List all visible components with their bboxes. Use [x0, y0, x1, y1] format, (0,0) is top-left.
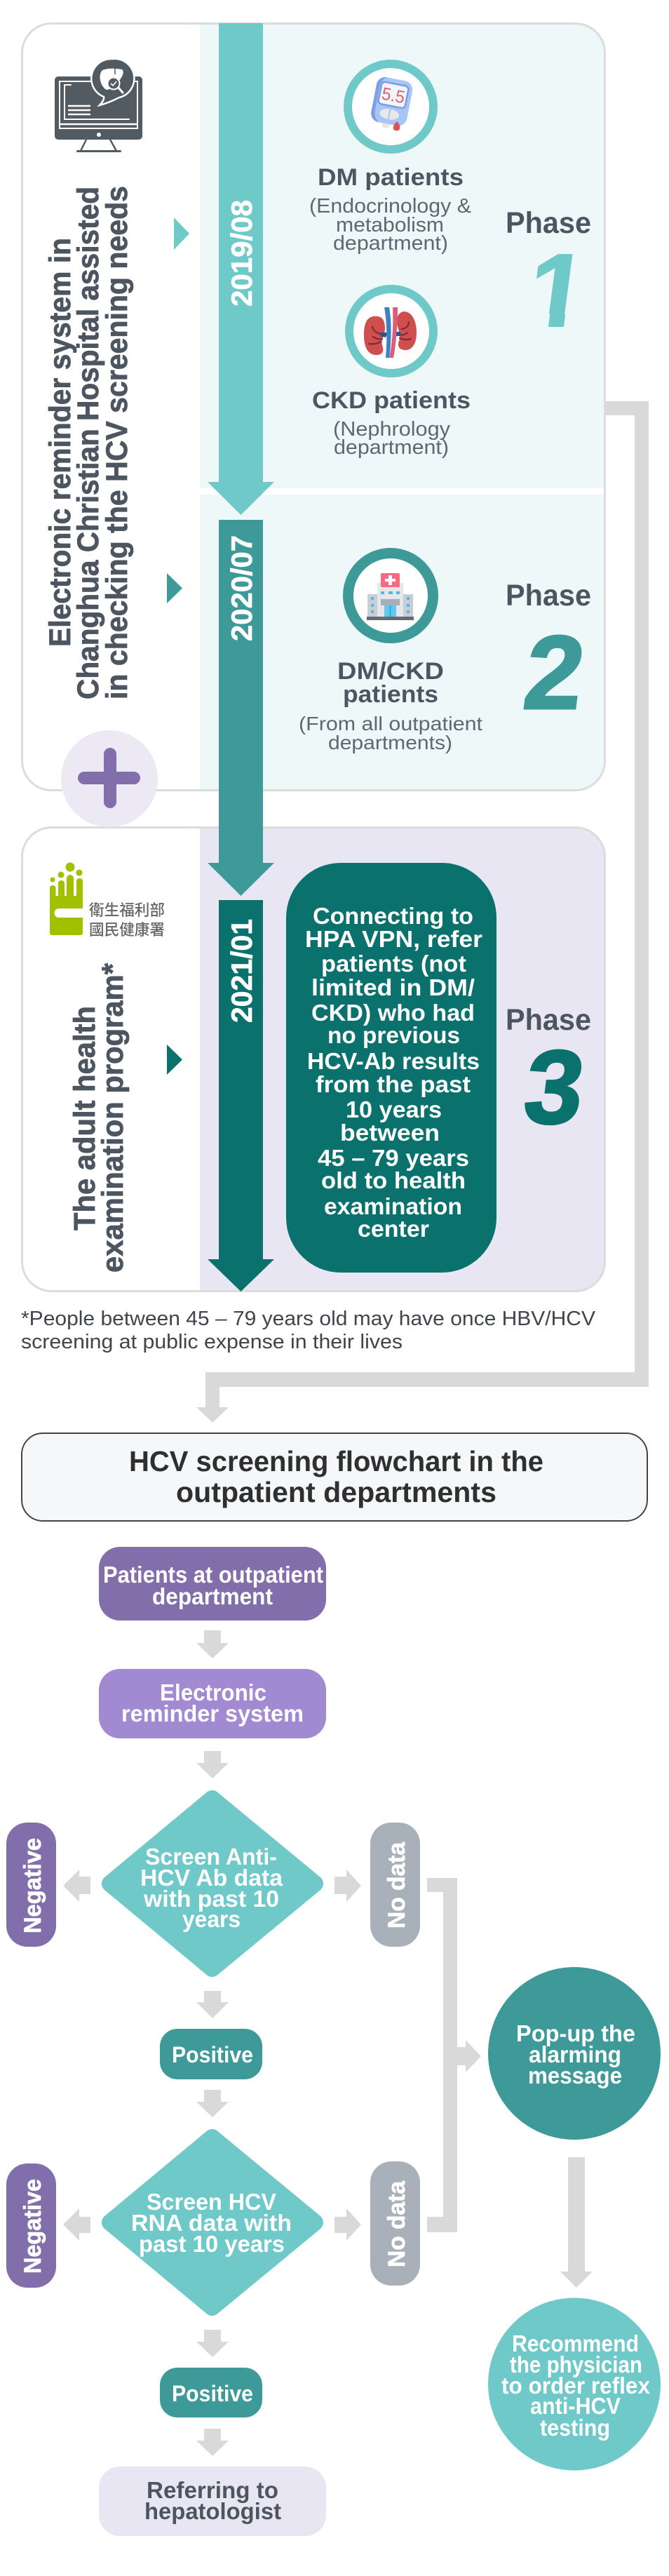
arrow: down to hepatologist	[196, 2429, 229, 2456]
icon: kidneys	[349, 289, 433, 373]
circle: recommend reflex testing: testing	[540, 2415, 610, 2441]
timeline arrow: 2019/08: 2019/08	[225, 200, 258, 307]
label: CKD patients: department)	[334, 436, 449, 459]
arrow: pointer to phase 2	[167, 573, 182, 603]
heading: electronic reminder system (vertical)	[43, 186, 134, 699]
connector: no data to pop-up message	[427, 1878, 481, 2232]
circle: recommend reflex testing: the physician	[510, 2352, 642, 2377]
label: phase 1: 1	[521, 233, 594, 349]
pill: no data 2	[370, 2161, 420, 2286]
box: electronic reminder system	[99, 1669, 326, 1738]
panel: adult health examination phase 3	[22, 828, 604, 1291]
box: referring to hepatologist: Referring to	[147, 2477, 278, 2503]
decision: screen HCV RNA data: past 10 years	[139, 2231, 285, 2257]
pill: negative 2	[6, 2164, 56, 2288]
icon: glucose meter: 5.5	[380, 84, 407, 107]
pill: no data 2: No data	[384, 2180, 410, 2267]
timeline arrow: 2021/01	[208, 900, 274, 1292]
panel: electronic reminder system phases 1 and 2	[22, 24, 604, 790]
label: DM/CKD patients	[299, 658, 482, 753]
pill: negative 2: Negative	[20, 2179, 46, 2274]
circle: pop-up the alarming message: Pop-up the	[516, 2020, 635, 2046]
arrow: to no data 1	[334, 1870, 361, 1902]
label: phase 2	[506, 579, 591, 731]
callout: connecting to HPA VPN: limited in DM/	[311, 974, 475, 1000]
label: phase 2: 2	[518, 615, 590, 731]
footnote: *People between 45 – 79 years old may have once HBV/HCV	[21, 1308, 596, 1330]
arrow: down to second screen	[196, 2090, 229, 2117]
icon: hospital	[348, 553, 433, 638]
callout: connecting to HPA VPN: CKD) who had	[311, 1000, 475, 1026]
footnote: screening at public expense in their lives	[21, 1331, 403, 1353]
timeline arrow: 2020/07	[208, 520, 274, 896]
arrow: to negative 2	[63, 2208, 90, 2241]
box: patients at outpatient department	[99, 1547, 326, 1621]
callout: connecting to HPA VPN: Connecting to	[313, 903, 473, 929]
label: DM patients: department)	[333, 232, 448, 255]
pill: no data 1: No data	[384, 1842, 410, 1928]
box: electronic reminder system: reminder system	[121, 1700, 304, 1726]
box: referring to hepatologist: hepatologist	[144, 2498, 281, 2524]
label: phase 3: Phase	[506, 1003, 591, 1037]
callout: connecting to HPA VPN: examination	[324, 1193, 462, 1219]
circle: pop-up the alarming message	[488, 1967, 661, 2140]
label: phase 1	[508, 211, 590, 327]
connector arrow: phases to flowchart	[196, 401, 649, 1423]
title: HCV screening flowchart	[22, 1433, 647, 1521]
title: HCV screening flowchart: HCV screening flowchart in the	[129, 1445, 543, 1477]
arrow: pop-up to recommendation	[560, 2157, 593, 2288]
box: positive 1	[160, 2029, 262, 2079]
callout: connecting to HPA VPN: between	[340, 1120, 440, 1146]
icon: health promotion administration logo: 衛生福利部	[89, 901, 165, 919]
icon: health promotion administration logo	[50, 863, 165, 939]
label: DM/CKD patients: (From all outpatient	[299, 713, 482, 734]
icon: health promotion administration logo: 國民健康署	[89, 921, 165, 939]
footnote	[21, 1308, 596, 1353]
circle: recommend reflex testing: to order reflex	[501, 2373, 651, 2399]
circle: recommend reflex testing: anti-HCV	[530, 2393, 621, 2419]
label: DM/CKD patients: departments)	[328, 732, 452, 753]
label: CKD patients	[312, 387, 471, 459]
circle: recommend reflex testing: Recommend	[512, 2330, 639, 2356]
icon: glucose meter	[348, 64, 433, 149]
decision: screen anti-HCV Ab data: HCV Ab data	[140, 1865, 283, 1891]
label: DM/CKD patients: DM/CKD	[337, 658, 444, 685]
circle: pop-up the alarming message: alarming	[529, 2041, 621, 2067]
box: electronic reminder system: Electronic	[160, 1679, 266, 1705]
decision: screen HCV RNA data	[110, 2138, 315, 2307]
heading: electronic reminder system (vertical): in checking the HCV screening needs	[100, 186, 134, 699]
timeline arrow: 2020/07: 2020/07	[225, 535, 258, 641]
decision: screen anti-HCV Ab data: with past 10	[143, 1886, 279, 1912]
arrow: down to positive 2	[196, 2330, 229, 2357]
callout: connecting to HPA VPN: no previous	[327, 1022, 460, 1048]
box: positive 1: Positive	[172, 2042, 253, 2067]
icon: plus sign	[61, 730, 158, 827]
label: phase 1: Phase	[506, 206, 591, 240]
box: positive 2: Positive	[172, 2381, 253, 2406]
label: DM patients: DM patients	[318, 164, 464, 191]
pill: negative 1	[6, 1823, 56, 1947]
label: DM patients: metabolism	[336, 214, 444, 236]
timeline arrow: 2021/01: 2021/01	[225, 919, 258, 1023]
box: positive 2	[160, 2368, 262, 2417]
decision: screen anti-HCV Ab data: years	[182, 1906, 241, 1932]
callout: connecting to HPA VPN: HCV-Ab results	[307, 1048, 480, 1074]
decision: screen anti-HCV Ab data: Screen Anti-	[145, 1844, 277, 1870]
callout: connecting to HPA VPN: HPA VPN, refer	[305, 926, 482, 952]
decision: screen HCV RNA data: RNA data with	[131, 2210, 292, 2236]
circle: recommend reflex testing	[488, 2298, 661, 2471]
heading: adult health examination program (vertical)	[68, 963, 130, 1273]
label: DM patients: (Endocrinology &	[309, 195, 471, 217]
decision: screen anti-HCV Ab data	[110, 1799, 315, 1968]
box: patients at outpatient department: Patients at outpatient	[103, 1562, 323, 1588]
callout: connecting to HPA VPN: patients (not	[321, 951, 466, 977]
callout: connecting to HPA VPN: from the past	[316, 1071, 471, 1097]
heading: adult health examination program (vertical): examination program*	[96, 963, 130, 1273]
heading: adult health examination program (vertical): The adult health	[68, 1006, 102, 1230]
pill: negative 1: Negative	[20, 1838, 46, 1933]
callout: connecting to HPA VPN: center	[358, 1216, 429, 1242]
pill: no data 1	[370, 1823, 420, 1947]
box: referring to hepatologist	[99, 2467, 326, 2536]
label: DM/CKD patients: patients	[343, 681, 438, 708]
arrow: pointer to phase 1	[174, 217, 189, 250]
callout: connecting to HPA VPN: 45 – 79 years	[318, 1145, 469, 1171]
arrow: down to positive 1	[196, 1991, 229, 2018]
callout: connecting to HPA VPN: 10 years	[346, 1096, 442, 1122]
heading: electronic reminder system (vertical): Electronic reminder system in	[43, 238, 77, 647]
label: phase 3	[506, 1003, 591, 1146]
callout: connecting to HPA VPN	[286, 863, 496, 1273]
label: CKD patients: CKD patients	[312, 387, 471, 414]
label: phase 3: 3	[518, 1029, 590, 1146]
label: CKD patients: (Nephrology	[333, 418, 451, 441]
arrow: to negative 1	[63, 1870, 90, 1902]
arrow: down to first screen	[196, 1751, 229, 1778]
callout: connecting to HPA VPN: old to health	[321, 1167, 466, 1193]
box: patients at outpatient department: department	[152, 1583, 273, 1609]
timeline arrow: 2019/08	[208, 23, 274, 515]
icon: computer with liver search bubble	[55, 59, 142, 152]
arrow: pointer to phase 3	[167, 1045, 182, 1075]
arrow: down to reminder	[196, 1630, 229, 1658]
heading: electronic reminder system (vertical): Changhua Christian Hospital assisted	[72, 187, 105, 699]
label: DM patients	[309, 164, 471, 255]
label: phase 2: Phase	[506, 579, 591, 612]
decision: screen HCV RNA data: Screen HCV	[147, 2189, 276, 2215]
circle: pop-up the alarming message: message	[528, 2062, 622, 2088]
title: HCV screening flowchart: outpatient departments	[176, 1476, 496, 1508]
arrow: to no data 2	[334, 2208, 361, 2241]
